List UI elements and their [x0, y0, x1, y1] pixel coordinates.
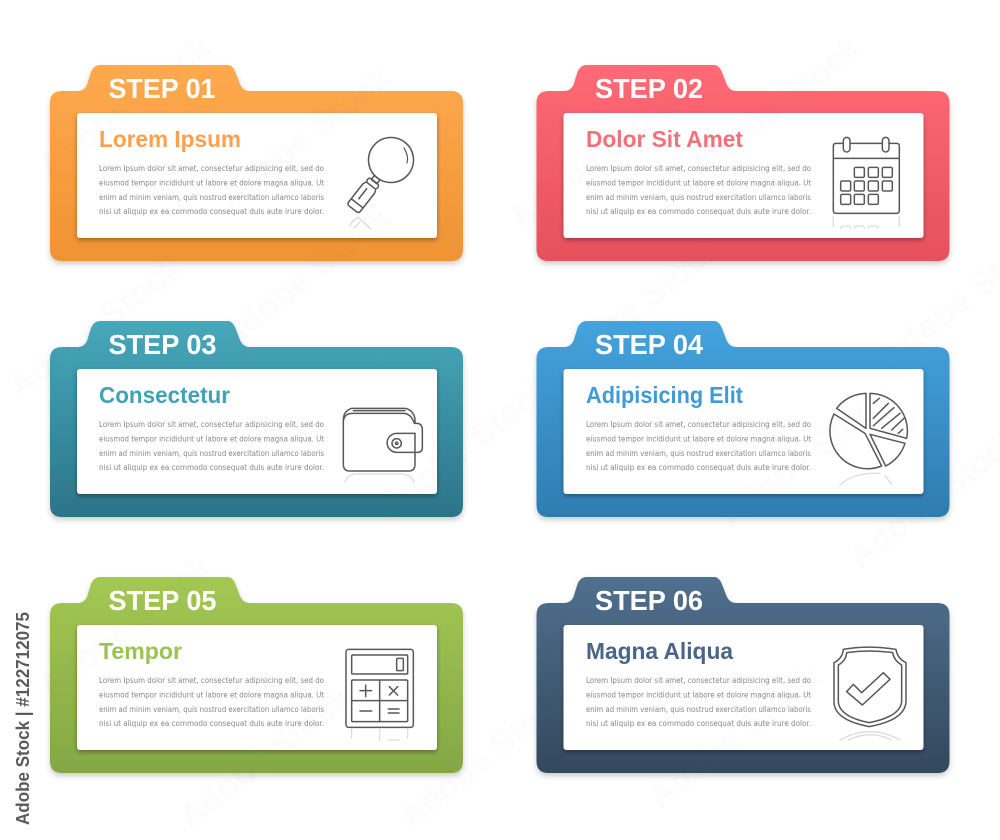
body text: enim ad minim veniam, quis nostrud exercitation ullamco laboris — [586, 449, 811, 458]
watermark: faint repeated stock text: Adobe Stock — [212, 58, 399, 216]
frame: blue tabbed panel — [536, 321, 950, 517]
body text — [586, 420, 811, 472]
body text: nisi ut aliquip ex ea commodo consequat duis aute irure dolor. — [586, 719, 811, 728]
heading: Dolor Sit Amet — [586, 126, 743, 152]
body text: Lorem Ipsum dolor sit amet, consectetur adipisicing elit, sed do — [99, 420, 324, 429]
heading: Lorem Ipsum — [99, 126, 241, 152]
body text: Lorem Ipsum dolor sit amet, consectetur adipisicing elit, sed do — [99, 676, 324, 685]
body text: nisi ut aliquip ex ea commodo consequat duis aute irure dolor. — [99, 719, 324, 728]
body text: nisi ut aliquip ex ea commodo consequat duis aute irure dolor. — [99, 463, 324, 472]
watermark: faint repeated stock text: Adobe Stock — [642, 658, 829, 816]
body text: nisi ut aliquip ex ea commodo consequat duis aute irure dolor. — [586, 207, 811, 216]
stock id label: Adobe Stock | #122712075 — [13, 612, 33, 825]
card: step 03 — [50, 321, 463, 517]
step label: STEP 01 — [108, 73, 216, 104]
body text — [586, 164, 811, 216]
watermark: faint repeated stock text: Adobe Stock — [372, 368, 559, 526]
body text: Lorem Ipsum dolor sit amet, consectetur adipisicing elit, sed do — [586, 164, 811, 173]
body text: enim ad minim veniam, quis nostrud exercitation ullamco laboris — [99, 449, 324, 458]
inner white panel — [564, 113, 924, 238]
heading: Consectetur — [99, 382, 230, 408]
step label: STEP 03 — [108, 329, 216, 360]
card: step 05 — [50, 577, 463, 773]
card: step 06 — [536, 577, 950, 773]
body text — [586, 676, 811, 728]
body text — [99, 164, 324, 216]
heading: Adipisicing Elit — [586, 382, 743, 408]
body text: enim ad minim veniam, quis nostrud exercitation ullamco laboris — [586, 193, 811, 202]
body text: eiusmod tempor incididunt ut labore et dolore magna aliqua. Ut — [99, 434, 324, 444]
body text: eiusmod tempor incididunt ut labore et dolore magna aliqua. Ut — [99, 690, 324, 700]
icon: wallet — [343, 408, 422, 482]
watermark: faint repeated stock text: Adobe Stock — [682, 28, 869, 186]
watermark: faint repeated stock text: Adobe Stock — [32, 548, 219, 706]
watermark: faint repeated stock text: Adobe Stock — [212, 198, 399, 356]
heading: Tempor — [99, 638, 182, 664]
inner white panel — [77, 113, 437, 238]
step label: STEP 02 — [595, 73, 703, 104]
inner white panel — [77, 369, 437, 494]
card: step 01 — [50, 65, 463, 261]
watermark: faint repeated stock text: Adobe Stock — [712, 378, 899, 536]
body text: eiusmod tempor incididunt ut labore et dolore magna aliqua. Ut — [99, 178, 324, 188]
watermark: faint repeated stock text: Adobe Stock — [502, 78, 689, 236]
watermark: faint repeated stock text: Adobe Stock — [2, 248, 189, 406]
icon: calculator — [346, 649, 413, 740]
step label: STEP 06 — [595, 585, 703, 616]
body text: nisi ut aliquip ex ea commodo consequat duis aute irure dolor. — [586, 463, 811, 472]
frame: orange tabbed panel — [50, 65, 463, 261]
body text — [99, 676, 324, 728]
body text: Lorem Ipsum dolor sit amet, consectetur adipisicing elit, sed do — [586, 676, 811, 685]
card: step 02 — [536, 65, 950, 261]
watermark: faint repeated stock text: Adobe Stock — [32, 28, 219, 186]
card: step 04 — [536, 321, 950, 517]
body text: enim ad minim veniam, quis nostrud exercitation ullamco laboris — [99, 193, 324, 202]
icon: calendar — [833, 137, 899, 228]
watermark: faint repeated stock text: Adobe Stock — [172, 678, 359, 836]
inner white panel — [77, 625, 437, 750]
heading: Magna Aliqua — [586, 638, 733, 664]
body text: eiusmod tempor incididunt ut labore et dolore magna aliqua. Ut — [586, 178, 811, 188]
body text: Lorem Ipsum dolor sit amet, consectetur adipisicing elit, sed do — [99, 164, 324, 173]
body text: eiusmod tempor incididunt ut labore et dolore magna aliqua. Ut — [586, 690, 811, 700]
watermark: faint repeated stock text: Adobe Stock — [392, 678, 579, 836]
frame: navy tabbed panel — [536, 577, 950, 773]
inner white panel — [564, 369, 924, 494]
icon: magnifying glass — [335, 128, 423, 229]
step label: STEP 04 — [595, 329, 703, 360]
body text: nisi ut aliquip ex ea commodo consequat duis aute irure dolor. — [99, 207, 324, 216]
body text: enim ad minim veniam, quis nostrud exercitation ullamco laboris — [99, 705, 324, 714]
watermark: faint repeated stock text: Adobe Stock — [542, 228, 729, 386]
frame: green tabbed panel — [50, 577, 463, 773]
body text: enim ad minim veniam, quis nostrud exercitation ullamco laboris — [586, 705, 811, 714]
frame: red tabbed panel — [536, 65, 950, 261]
frame: teal tabbed panel — [50, 321, 463, 517]
icon: pie chart — [830, 393, 907, 485]
step label: STEP 05 — [108, 585, 216, 616]
body text: eiusmod tempor incididunt ut labore et dolore magna aliqua. Ut — [586, 434, 811, 444]
body text — [99, 420, 324, 472]
inner white panel — [564, 625, 924, 750]
body text: Lorem Ipsum dolor sit amet, consectetur adipisicing elit, sed do — [586, 420, 811, 429]
icon: shield with check mark — [834, 647, 906, 740]
